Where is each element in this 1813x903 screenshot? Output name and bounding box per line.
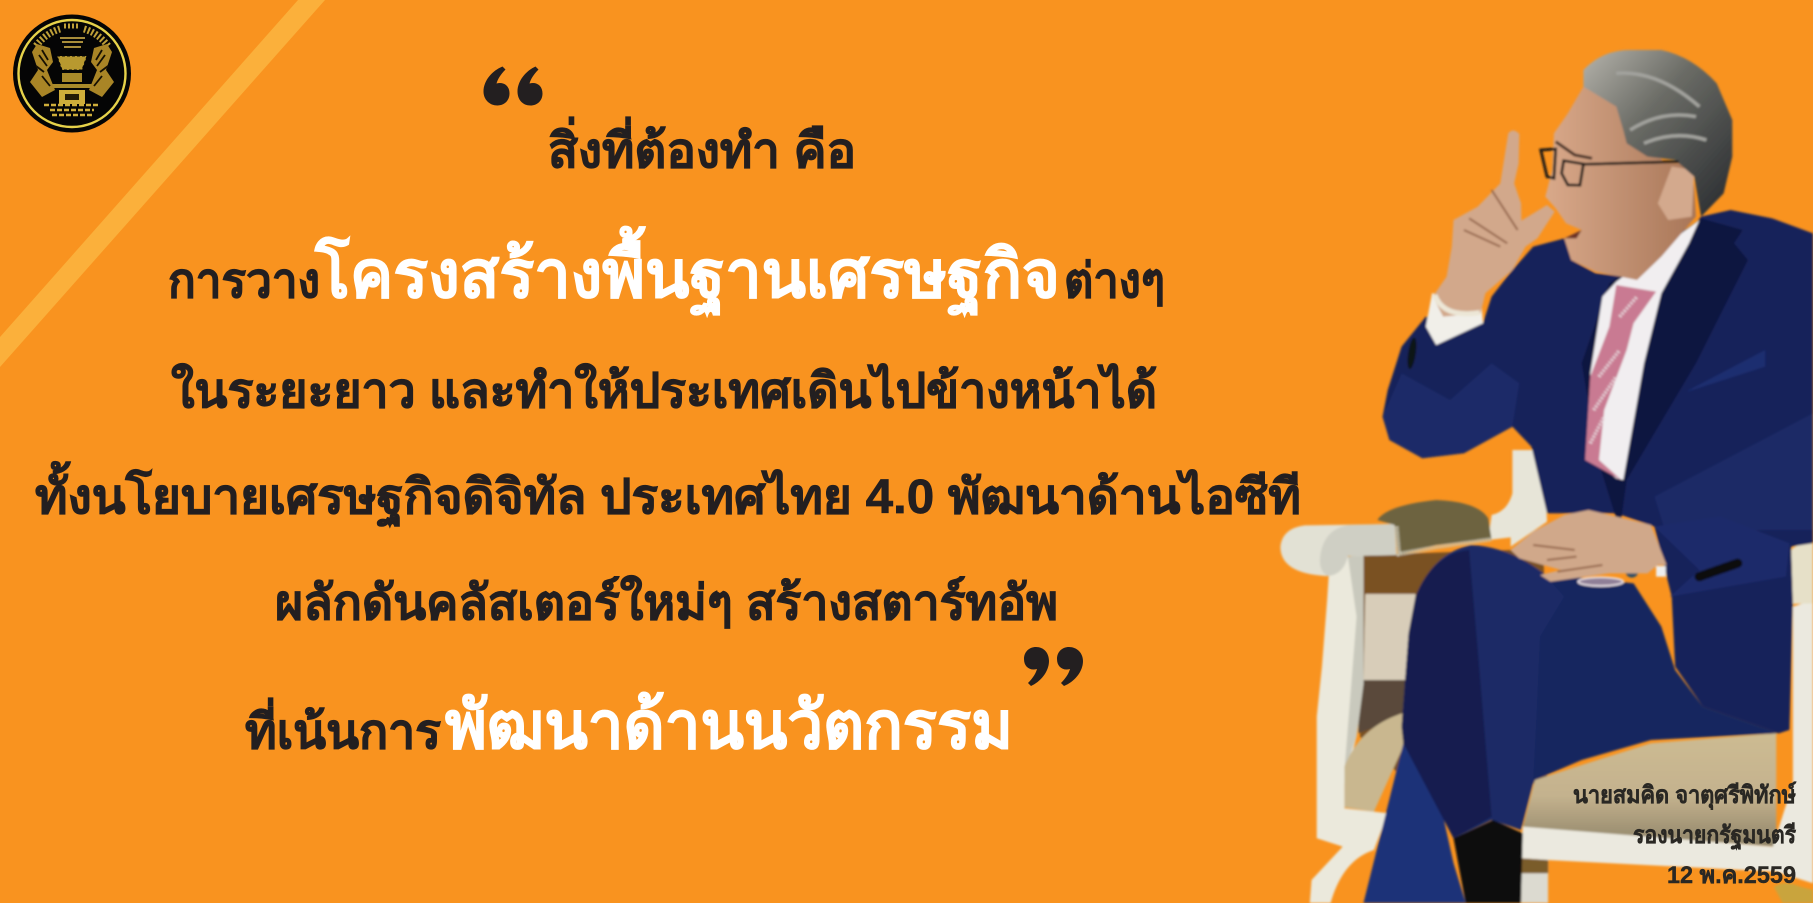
quote text [35, 116, 1301, 762]
trousers and sock [1364, 545, 1779, 903]
caption: name, position, date: รองนายกรัฐมนตรี [1633, 822, 1796, 851]
quotation mark: closing [1024, 647, 1083, 686]
line 1: สิ่งที่ต้องทำ คือ [548, 116, 856, 178]
line 6: พัฒนาด้านนวัตกรรม [445, 688, 1013, 762]
line 2: ต่างๆ [1064, 255, 1165, 308]
line 2: การวาง [168, 255, 320, 308]
icon: government seal [13, 14, 131, 132]
line 5: ผลักดันคลัสเตอร์ใหม่ๆ สร้างสตาร์ทอัพ [275, 574, 1058, 630]
line 3: ในระยะยาว และทำให้ประเทศเดินไปข้างหน้าได้ [171, 362, 1157, 418]
line 2: โครงสร้างพื้นฐานเศรษฐกิจ [314, 225, 1060, 317]
photo: man seated on chair [1280, 50, 1813, 903]
caption: name, position, date [1573, 781, 1797, 889]
caption: name, position, date: 12 พ.ค.2559 [1667, 862, 1796, 889]
line 2 [168, 225, 1165, 317]
line 6: ที่เน้นการ [245, 697, 441, 759]
head [1541, 50, 1732, 280]
suit jacket [1383, 210, 1813, 733]
chair [1280, 450, 1813, 903]
diagonal stripe [0, 0, 325, 367]
line 4: ทั้งนโยบายเศรษฐกิจดิจิทัล ประเทศไทย 4.0 พัฒนาด้านไอซีที [35, 461, 1301, 528]
caption: name, position, date: นายสมคิด จาตุศรีพิทักษ์ [1573, 781, 1797, 811]
lower hand on knee [1511, 510, 1667, 586]
shirt and tie [1585, 220, 1699, 480]
quotation mark: opening [484, 66, 542, 106]
raised hand and cuff [1426, 130, 1555, 345]
